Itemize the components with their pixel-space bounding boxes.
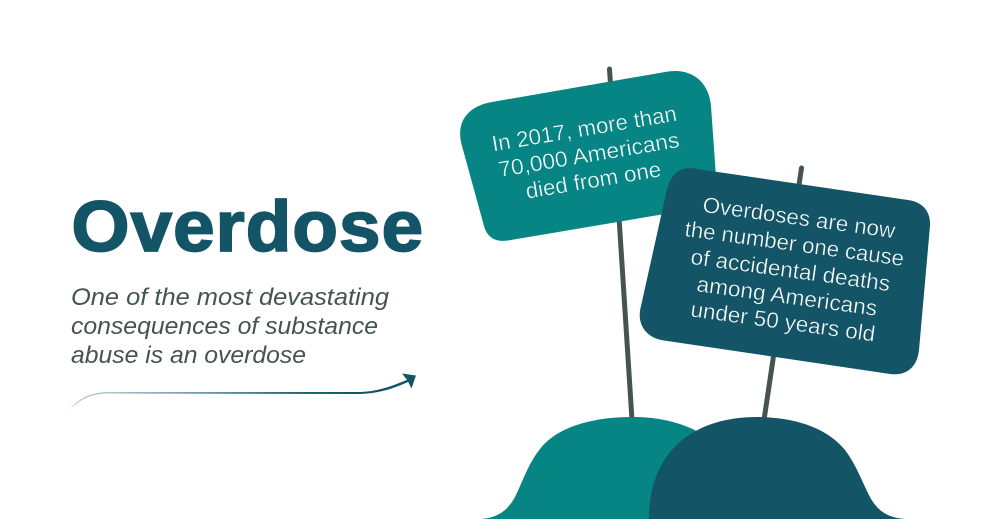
mound: right — [649, 417, 905, 519]
sign text: left: died from one — [524, 156, 663, 204]
pole: right sign — [764, 168, 802, 420]
sign text: right: among Americans — [695, 271, 879, 321]
sign text: right: under 50 years old — [689, 297, 877, 347]
subtitle text block: abuse is an overdose — [71, 342, 306, 369]
sign text: right: the number one cause — [683, 216, 906, 271]
sign text: right: Overdoses are now — [701, 192, 897, 243]
sign text: left — [490, 101, 681, 204]
pole: left sign — [610, 69, 632, 420]
subtitle text block — [71, 284, 390, 369]
subtitle text block: One of the most devastating — [71, 284, 390, 311]
sign text: right — [683, 192, 906, 347]
sign text: left: In 2017, more than — [490, 101, 679, 156]
sign text: right: of accidental deaths — [689, 244, 892, 296]
arrow — [70, 374, 416, 410]
subtitle text block: consequences of substance — [71, 313, 378, 340]
title: Overdose — [72, 188, 424, 267]
mound: left — [480, 417, 780, 519]
sign: left — [460, 71, 718, 241]
sign: right — [640, 168, 930, 374]
sign text: left: 70,000 Americans — [496, 127, 681, 182]
